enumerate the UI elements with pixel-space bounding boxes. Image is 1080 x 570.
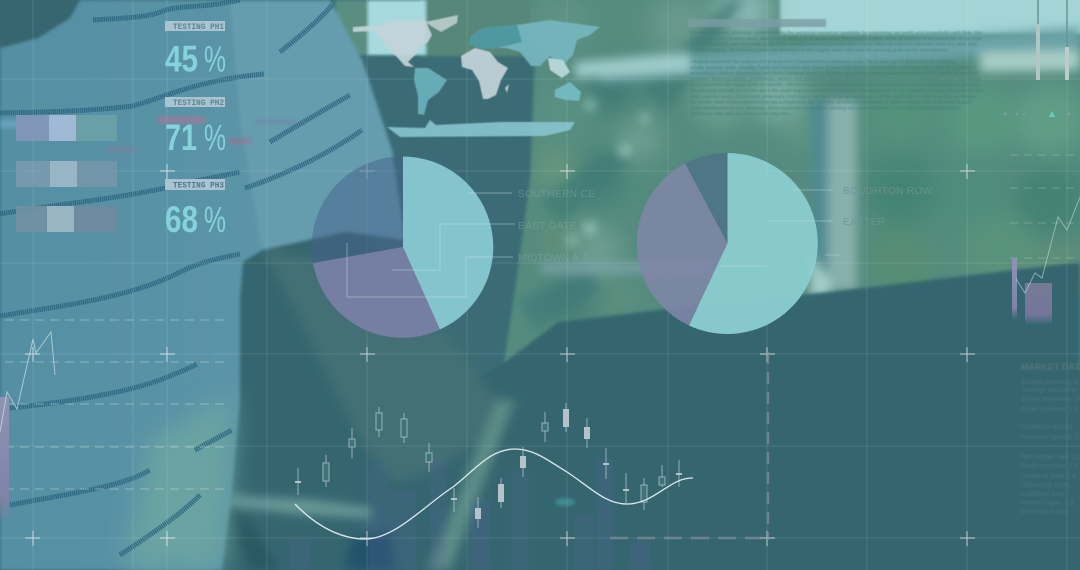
right faint data text: Forecast index <box>1021 509 1067 516</box>
stat: testing ph2 <box>165 97 226 158</box>
wave curve <box>295 449 693 539</box>
greenland <box>425 15 458 32</box>
teal smudge <box>555 498 575 506</box>
dashed axis lines <box>610 352 772 540</box>
stat: testing ph3: % <box>204 199 226 240</box>
article text block: Tax planning: typically the income tax is the single largest expense in a household. Managing taxes is not a question of if you will pay taxes, but <box>690 88 983 94</box>
article text block: which it can later save you money in the long term. <box>690 111 790 117</box>
pie labels: BOUGHTON ROW <box>843 186 933 197</box>
pie labels: SOUTHERN CE <box>518 189 595 200</box>
candlestick chart <box>295 403 682 528</box>
slice: teal <box>403 156 493 330</box>
pie chart left <box>312 156 595 338</box>
right faint data text: Revenue growth 27 <box>1021 434 1080 441</box>
right faint data text: Net margin rate 12 <box>1021 454 1079 461</box>
small status icons <box>1004 111 1070 117</box>
antarctica <box>387 120 575 137</box>
right faint data text: Equity exposure 18 <box>1021 396 1080 403</box>
left bar blocks <box>16 115 117 232</box>
pie labels: MIDTOWN A.S <box>518 253 589 264</box>
southeast asia <box>548 58 570 78</box>
stat: testing ph2: TESTING PH2 <box>173 98 224 108</box>
stat: testing ph1: 45 <box>165 38 198 80</box>
head shadow <box>0 0 76 48</box>
pie labels <box>843 186 933 228</box>
bar row 2 <box>16 161 117 187</box>
article text block: in time. Household cash flow totals up all of the expected sources of income within a year, minus all expected expenses within the same year. <box>690 42 978 48</box>
pie labels: EAST GATE X <box>518 221 587 232</box>
shirt stripes <box>0 0 362 555</box>
leader lines <box>347 193 515 297</box>
article text block: Personal financial planning: understanding the personal resources available by examining net worth and household cash flow. Net <box>690 30 983 36</box>
article text block: worth is a person's balance sheet, calculated by adding up all assets under that person's control, minus all liabilities of the household, at one point <box>690 36 983 42</box>
stat: testing ph2: % <box>204 117 226 158</box>
slice: teal <box>689 153 818 334</box>
arm and laptop blur <box>222 248 515 570</box>
right faint data text: Liabilities total <box>1021 491 1065 498</box>
article text block: an insurance contract. Determining how much insurance to get, at the most cost effective terms requires knowledge of the market for personal <box>690 71 978 77</box>
article text block: Understanding how to take advantage of the myriad tax breaks when planning one's personal finances can make a significant impact in <box>690 105 960 111</box>
foliage backdrop <box>420 0 1080 370</box>
world map <box>353 15 600 137</box>
pie chart right <box>637 153 933 334</box>
testing stats <box>165 21 226 240</box>
stat: testing ph1: TESTING PH1 <box>173 22 224 32</box>
australia <box>555 82 581 101</box>
right faint data text: Cash reserves 9.4 <box>1021 463 1078 470</box>
right faint data text: Quarterly results <box>1021 424 1073 431</box>
article text block: when and how much. Government gives many incentives in the form of tax deductions and credits, which can be used to reduce the lifetime <box>690 94 976 100</box>
right dashed guides <box>1010 155 1080 258</box>
bench and chair dark shapes <box>240 56 1080 570</box>
article text block: tax burden. Most modern governments use a progressive tax. Typically, as one's income grows, a higher marginal rate of tax must be paid. <box>690 100 972 106</box>
madagascar <box>505 84 509 93</box>
crosshair markers <box>25 164 975 546</box>
stat: testing ph1 <box>165 21 226 80</box>
window beam and post <box>575 27 1080 298</box>
slice: purple <box>313 247 440 338</box>
article text block: insurance. Business owners, professionals, athletes and entertainers require specialized insurance professionals to adequately protect themselves. <box>690 76 982 82</box>
left dashed guides <box>5 320 228 489</box>
stat: testing ph2: 71 <box>165 117 197 158</box>
right faint data text: Dividend yield 2.6 <box>1021 473 1076 480</box>
article text block: liability, property, death, disability, health and long term care. Some of these risks may be self-insurable, while most will require the purchase of <box>690 65 977 71</box>
stat: testing ph3: TESTING PH3 <box>173 180 224 190</box>
stat: testing ph3 <box>165 179 226 240</box>
stat: testing ph1: % <box>204 38 226 80</box>
pie labels <box>518 189 595 264</box>
article text block: Since insurance also enjoys some tax benefits, utilizing insurance investment products may be a critical piece of the overall investment planning. <box>690 82 980 88</box>
shirt lower fold tint <box>125 395 232 570</box>
bar chart behind curve <box>290 460 650 570</box>
slice: purple <box>637 164 728 326</box>
stat: testing ph3: 68 <box>165 199 198 240</box>
left line chart <box>0 332 55 522</box>
south america <box>414 68 447 115</box>
bar row 1 <box>16 115 117 141</box>
right faint data text: Interest rates 1.8 <box>1021 500 1074 507</box>
pie labels: EASTER <box>843 217 885 228</box>
bright window behind chair <box>335 0 530 56</box>
article text block: Adequate protection: the analysis of how to protect a household from unforeseen risks. These risks can be divided into the following: <box>690 59 956 65</box>
north america <box>353 20 432 67</box>
leader lines <box>720 190 840 266</box>
slice: slate <box>685 153 728 244</box>
article text block <box>688 19 983 117</box>
europe <box>469 24 522 49</box>
right faint data text: Asset turnover 3.1 <box>1021 406 1078 413</box>
right faint data text: Operating costs <box>1021 482 1071 489</box>
right faint data text <box>1021 362 1080 516</box>
shirt <box>0 0 405 570</box>
article text block: From this analysis, the financial planner can determine to what degree and in what time the personal goals can be accomplished. <box>690 47 948 53</box>
right faint data text: Savings allocation <box>1021 387 1078 394</box>
bar row 3 <box>16 206 117 232</box>
slice: slate <box>312 156 403 263</box>
glitch streaks <box>0 117 297 151</box>
right line chart <box>1012 197 1080 325</box>
africa <box>461 48 508 99</box>
asia <box>497 20 600 66</box>
top right candles <box>1036 0 1069 80</box>
